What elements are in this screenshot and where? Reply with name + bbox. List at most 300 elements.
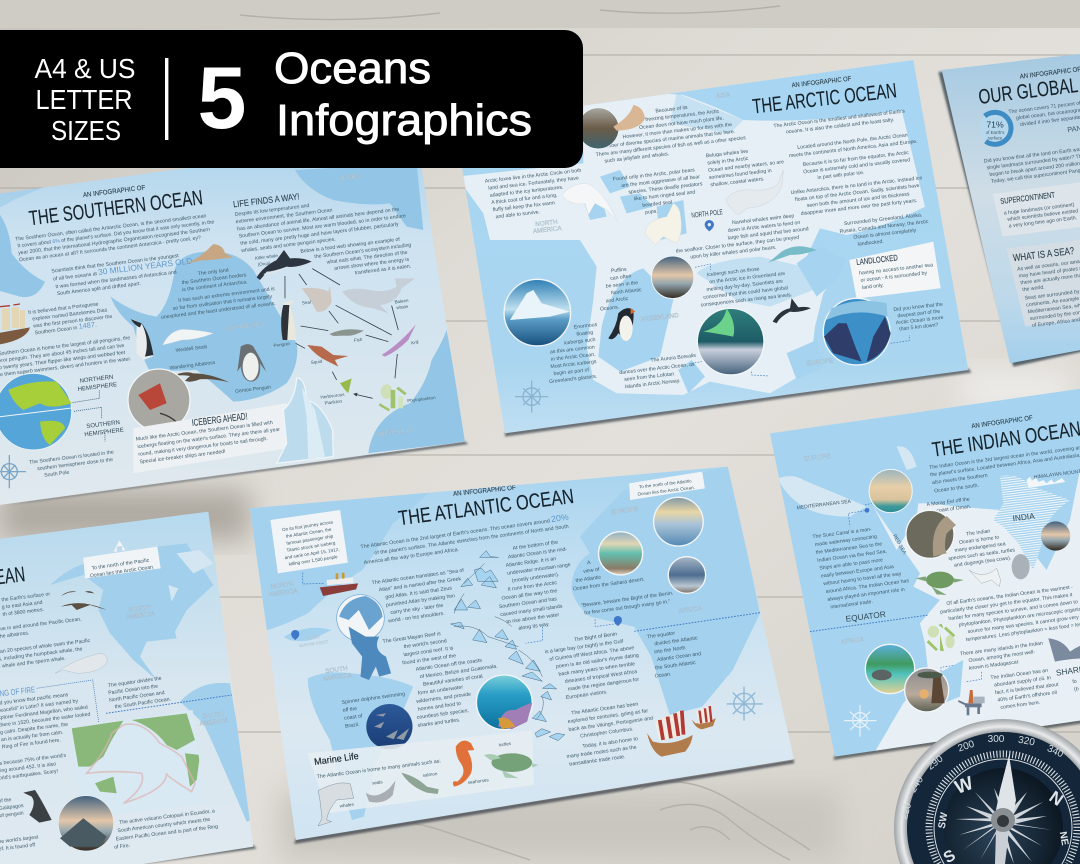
marine life box [307,731,538,826]
text: Mayan reef: Atlantic Ocean off the coasts [415,658,483,673]
text: no land: Unlike Antarctica, there is no land in the Arctic. Instead ice [790,175,923,196]
species labels: Killer whale [255,253,278,261]
text: Bight: is a large bay (or bight) in the Gulf [544,639,624,655]
text: ice: in part with polar ice. [817,170,865,181]
intro text: also meets the Southern [932,473,988,486]
equator text: Pacific Ocean into the [108,683,159,696]
map labels: AFRICA [841,636,865,646]
text: equator: Ocean. [654,671,672,680]
text: mid-Atlantic ridge: Southern Ocean and has [499,596,558,610]
small heading: AN INFOGRAPHIC OF [971,415,1033,430]
text: belugas: solely in the Arctic [707,156,749,167]
what is a sea box [1007,239,1080,330]
equator dashed line [810,615,928,632]
text: landlocked: Russia, Canada and Norway, the Arctic [839,219,929,235]
labels [339,741,512,809]
ring of fire text: Ring of Fire is found here. [2,737,61,751]
landlocked box: having no access to another sea [859,262,933,277]
map: South America [308,672,413,820]
panel: the atlantic ocean [247,463,804,844]
text: foxes: and able to survive. [495,209,540,220]
explorer text: was the first person to discover the [33,314,113,329]
banner: title [274,44,532,145]
map: blue land shapes [583,93,847,393]
map labels: GREENLAND [639,312,680,324]
text: dolphins: coast of [344,713,363,722]
phytoplankton [927,624,955,651]
text: equator: into the North [654,645,686,655]
text: deepest part: Did you know that the [893,302,943,313]
food web arrows [285,269,398,398]
albatross text: live in and around the Pacific Ocean, [0,616,82,633]
map labels: AUSTRALIA [377,427,413,438]
text: Suez: the Mediterranean Sea to the [816,541,883,556]
marine life box: Marine Life [313,750,359,767]
text: location: meets the continents of North America, Asia and Europe. [789,139,918,159]
title: THE ATLANTIC OCEAN [397,485,575,530]
map: Madagascar [938,660,963,703]
text: trade routes: transatlantic trade route. [569,754,626,768]
text: aurora: dances over the Arctic Ocean, as [619,362,695,376]
map labels: AMERICA [199,717,229,728]
explorer text: explorer named Bartolomeu Dias [32,307,108,323]
species labels: Squid [310,359,323,365]
text: Bight: back many years to when terrible [558,661,636,678]
text: polar bears: Found only in the Arctic, polar bears [613,167,695,183]
text: oil: The Indian Ocean has an [990,668,1048,681]
text: Sahara view: the Atlantic [575,575,602,584]
text: icebergs melting: consequences such as rising sea levels. [700,292,793,309]
text: Bight: made the region dangerous for [567,677,640,693]
photo circle: sunrise sea [654,497,703,546]
text: species: Because of its [655,105,688,114]
walrus [185,244,233,264]
text: mid-Atlantic ridge: (mostly underwater). [511,572,560,584]
life text: has an abundance of animal life. Almost all animals here depend on the [237,207,400,232]
text: Bight: of Guinea off West Africa. The above [549,645,635,663]
text: species: freezing temperatures, the Arctic [645,109,720,123]
photo circle: beach [598,532,643,575]
text: endangered species: and dugongs (sea cows). [954,555,1012,569]
north note [629,472,705,500]
photo circle: greenland sea [651,256,694,299]
Atlas statue and globe [337,595,391,680]
map labels: EUROPE [806,357,833,367]
albatross drawing [61,591,107,610]
seal [366,781,396,802]
species labels: Weddell Seals [175,344,208,354]
banner: title: Infographics [276,96,532,145]
map pin: Mayan reef: GREAT [305,634,321,641]
arctic fox [562,183,617,220]
compass degree ring [929,754,1077,864]
text: dolphins: Brazil. [345,722,360,730]
equator text: North Pacific Ocean and [109,690,165,704]
labels: whales [339,802,355,809]
text: enormous icebergs: Most Arctic icebergs [550,359,597,370]
text: puffins: North Atlantic [611,287,642,297]
equator dashed line and bight marker [525,613,760,643]
text: Mayan reef: largest coral reef. It is [403,645,454,658]
banner: sizes text: A4 & US [34,53,136,84]
text: belugas: Ocean and nearby waters, so are [708,159,784,174]
species labels: Wandering Albatross [169,360,216,371]
ring chart 71 percent: of Earth's [986,130,1005,135]
hemisphere labels: HEMISPHERE [78,382,118,393]
map labels: SOUTH [202,711,225,721]
compass letters [937,773,1070,864]
text: landlocked: landlocked. [857,239,884,248]
map pin: Mayan reef [291,630,329,648]
text: polar bears: pups. [645,208,658,216]
text: ice: Because it is so far from the equator, the Arctic [803,150,909,168]
phytoplankton [379,384,407,411]
Titanic note: On its first journey across [282,519,333,532]
text: species: such as jellyfish and whales. [604,151,669,165]
text: endangered species: The Indian [966,528,991,538]
banner: sizes text: SIZES [51,115,121,146]
Antarctica text: the Southern Ocean borders [181,272,247,286]
map: Europe and Africa [571,467,760,715]
text: no land: floats on top of the Arctic Ocean. Sadly, scientists have [795,183,920,203]
text: landlocked: Surrounded by Greenland, Alaska, [844,212,923,227]
compass numerals: 300 [988,734,1005,745]
oil rig [958,690,985,715]
environment text: unexplored and the least understood of all oceans. [161,301,276,321]
narwhal [768,246,817,263]
text: Mayan reef: wilderness, and provide [416,691,472,705]
text: moray: A Moray Eel off the [926,497,970,508]
text: Bight: European visitors. [566,689,608,701]
equator text: The equator divides the [108,676,162,689]
text: aurora: The Aurora Borealis [650,353,696,364]
text: species: Ocean does not have much plant life. [639,115,724,131]
food web text: arrows show where the energy is [334,257,410,272]
text: polar bears: species. These deadly predators [628,181,703,196]
text: Sahara view: A [587,560,591,566]
text: Suez: Ships are able to pass more [819,557,884,572]
north pole marker [691,207,723,231]
text: no land: disappear more and more over the past forty years. [800,198,918,217]
text: belugas: Beluga whales live [706,149,749,159]
map labels: AMERICA [323,672,353,683]
intro text: th of 3800 metres. [2,607,44,618]
map labels: SOUTH [325,665,348,675]
connectors [941,665,982,682]
Titanic note [270,510,348,573]
heading small: AN INFOGRAPHIC OF [791,76,852,89]
herbivorous plankton [340,378,352,393]
text: puffins: be seen in the [606,280,639,290]
text: Mayan reef: Beautiful varieties of coral [423,674,483,688]
supercontinent box: a very long time ago on Earth. [1008,215,1077,229]
location text: southern hemisphere close to the [37,457,113,472]
labels: seahorses [467,777,490,785]
map labels: ASIA [716,91,731,100]
text: Mayan reef: the world's second [403,638,447,650]
species labels: Penguin [273,341,291,348]
text: Mayan reef: homes and food to [417,701,462,713]
photo circle: stormy sea [668,557,706,593]
compass numerals: 340 [1045,743,1065,760]
text: aurora: Islands in Arctic Norway. [625,378,681,390]
north note: To the north of the Atlantic [639,478,692,489]
intro text: divided it into five separate [1020,115,1080,128]
text: enormous icebergs: icebergs such [564,337,596,347]
gentoo penguin [237,344,266,382]
text: foxes: adapted to the icy temperatures. [490,185,564,199]
text: puffins: Puffins [611,267,627,274]
mountains [1027,477,1065,488]
supercontinent box [993,182,1080,237]
food web text: what eats what. The direction of the [326,250,408,266]
map labels: EUROPE [611,506,638,516]
map labels [125,604,229,728]
banner: number 5: 5 [198,48,246,147]
text: Mayan reef: found in the west of the [402,653,457,666]
labels: turtles [498,741,512,747]
north note: Ocean lies the Arctic Ocean. [637,485,695,497]
landlocked box: land only. [862,283,884,291]
food web [169,250,436,411]
map labels: ANTARCTICA [225,321,266,333]
text: landlocked: Ocean is almost completely [853,228,917,241]
polar bear [645,203,681,245]
text: sharks: (b [1074,686,1079,693]
volcano text: of Fire. [114,843,130,851]
icon: compass rose [844,705,877,737]
panel: the pacific ocean [0,510,260,864]
text: rhyme: for few come out though many go in." [584,599,671,617]
text: islands: Ocean, among the most well- [968,649,1036,664]
Titanic note: and sank on April 15, 1912, [284,547,340,560]
ring chart 71 percent [983,110,1014,147]
whale [318,783,354,826]
species labels: Krill [411,340,419,345]
ring of fire text: g calm. Despite the name, the [0,722,69,736]
puffin [608,308,635,341]
life text: Despite its low temperatures and [234,203,310,218]
sperm whale [55,654,107,673]
text: mid-Atlantic ridge: caused many small islands [500,604,563,618]
hemisphere labels: SOUTHERN [86,420,120,430]
map labels [267,506,703,683]
seahorse [453,741,474,787]
Titanic illustration [320,573,358,596]
text: Suez: without having to travel all the way [823,571,902,587]
ring of fire text: xplorer Ferdinand Magellan, who sailed [0,704,88,721]
map: North America [250,480,440,637]
text: mid-Atlantic ridge: underwater mountain range [507,562,571,577]
text: icebergs melting: Icebergs such as those [707,266,760,278]
intro text: Ocean to the south. [934,483,979,495]
map labels: EQUATOR [845,609,886,624]
photo circle: walrus [578,105,645,149]
map labels: NORTH [128,604,151,614]
text: narwhals: upon by killer whales and polar bears. [690,245,777,260]
photo circle: aurora [697,308,764,375]
compass numerals: 220 [899,801,914,821]
text: deepest part: Arctic Ocean is more [896,315,944,326]
banner: title: Oceans [274,44,431,93]
text: Suez: international trade. [830,599,873,611]
hemisphere labels: NORTHERN [79,375,114,385]
age text: South America split and drifted apart. [57,281,141,297]
intro text: It covers about 6% of the planet's surface. Did you know that it was only recently, in the [17,219,215,249]
iceberg ahead box [133,403,297,473]
text: narwhals: the seafloor. Closer to the surface, they can be preyed [676,235,800,255]
explorer text: It is believed that a Portuguese [28,301,99,316]
orca [257,250,312,280]
intro text: America all the way to Europe and Africa. [363,547,459,566]
text: warmest: harder for many species to survive, and it comes down to [948,599,1078,622]
map labels [225,173,413,438]
icon: compass rose [0,455,26,488]
species labels: Plankton [324,399,343,406]
food web text: the Southern Ocean's ecosystem including [314,242,412,260]
Pangaea text: Did you know that all the land on Earth was [984,147,1080,165]
food web text: Below is a food web showing an example of [300,237,400,255]
text: islands: There are many islands in the Indian [960,641,1043,657]
text: Suez: made waterway connecting [815,534,877,548]
map labels: NORTH [270,581,294,591]
text: species: However, it more than makes up for this with the [622,122,732,140]
text: Suez: Indian Ocean via the Red Sea. [817,549,887,564]
species labels: Gentoo Penguin [235,384,272,395]
environment text: It has such an extreme environment and is [178,286,275,304]
compass numerals [899,734,1065,821]
note: north of the Pacific: To the north of the Pacific [91,558,150,572]
volcano text: The active volcano Cotopaxi in Ecuador, a [119,808,215,826]
iceberg ahead box: round, making it very dangerous for boats to sail through. [138,436,268,458]
equator text: the South Pacific Ocean. [114,696,171,710]
photo circle: sunset coast [1041,521,1070,551]
text: narwhals: Narwhal whales swim deep [732,213,795,226]
text: equator: The equator [647,631,675,640]
text: sharks: fo [1072,679,1077,685]
text: belugas: sometimes found feeding in [709,168,772,181]
sailing ship [0,304,30,345]
text: deepest part: deepest part of the [897,309,941,319]
text: puffins: Oceans. [600,304,619,313]
text: foxes: Arctic foxes live in the Arctic Circle on both [485,168,582,185]
note: north of the Pacific [83,540,161,579]
text: rhyme: "Beware, beware the Bight of the Benin, [581,590,674,609]
shark [1048,638,1080,662]
text: Sahara view: Ocean from the Sahara desert. [573,577,645,592]
small heading: AN INFOGRAPHIC OF [453,485,516,498]
text: mid-Atlantic ridge: It runs from the Arctic [507,580,558,593]
photo circle: dolphins [366,704,413,749]
text: Atlas: The Atlantic ocean translates as "Sea of [371,568,464,586]
text: Mayan reef: The Great Mayan Reef is [382,631,441,645]
title: THE SOUTHERN OCEAN [28,186,204,230]
text: dolphins: off the [342,706,358,714]
food web penguin [281,300,296,340]
map labels: AFRICA [678,605,703,615]
Titanic note: killing over 1,500 people [288,554,338,567]
ring of fire text: there in 1520, because the water looked [0,712,91,729]
text: ice: Ocean is extremely cold and is usually covered [803,157,911,175]
emperor penguin text: Southern Ocean is home to the largest of all penguins, the [0,335,131,357]
text: Suez: always played an important role in [827,587,905,603]
map: pale polar sea [457,94,925,395]
text: enormous icebergs: floating [576,330,594,338]
compass numerals: 320 [1017,735,1036,748]
life text: extreme environment, the Southern Ocean [235,207,333,225]
north pole marker: NORTH POLE [691,207,723,220]
photo circle: icebreaker [128,369,190,431]
text: enormous icebergs: begin as part of [553,367,590,377]
title banner [0,30,583,168]
text: Mayan reef: countless fish species, [416,708,469,721]
supercontinent box: SUPERCONTINENT [1000,190,1056,206]
volcano text: Eastern Pacific Ocean and is part of the Ring [115,824,218,842]
compass letters: W [952,773,976,799]
Antarctica text: is the continent of Antarctica. [182,279,248,293]
what is a sea box: Seas are surrounded by [1024,289,1080,302]
seal [969,568,1001,587]
photo circle: coral reef [476,675,532,730]
text: foxes: A thick coat of fur and a long, [491,193,558,206]
supercontinent box: a huge landmass (or continent) [1004,202,1075,217]
iceberg ahead box: Special ice-breaker ships are needed! [139,449,226,465]
seal [302,286,332,312]
photo circle: moray eel [906,510,956,558]
hemisphere labels: HEMISPHERE [84,428,124,438]
viking ships [647,705,716,757]
headings: AN INFOGRAPHIC OF [83,185,146,199]
text: endangered species: many endangered sea [954,541,1006,554]
mid-Atlantic ridge mountains [451,551,565,741]
text: oil: abundant supply of oil. In [994,675,1052,689]
earthquake text: orld's earthquakes. Scary! [0,768,58,782]
map labels: MEDITERRANEAN SEA [796,499,852,511]
compass letters: NE [1057,831,1070,847]
text: polar bears: bearded seal [642,199,672,209]
photo circle: iceberg [504,279,571,346]
ring of fire heading [0,680,99,722]
text: Suez: easily between Europe and Asia [821,564,894,580]
text: islands: known is Madagascar. [969,659,1020,672]
text: warmest: Of all Earth's oceans, the Indian Ocean is the warmest - [946,584,1073,607]
hemisphere labels [73,374,124,442]
intro text: of the planet's surface. The Atlantic stretches from the continents of North and South [374,524,569,556]
text: endangered species: species such as seals, turtles [948,547,1016,562]
text: explored: back as the Vikings, Portuguese and [568,716,654,733]
text: Suez: The Suez Canal is a man- [812,527,872,540]
text: polar bears: like to hunt ringed seal and [634,189,696,202]
compass [894,719,1080,864]
map labels [796,453,1080,678]
galapagos penguin [23,790,52,823]
text: Atlas: Atlas" and is named after the Greek [378,576,462,593]
Titanic note: the Atlantic Ocean, the [286,527,332,539]
text: intro: oceans. It is also the coldest and the least salty. [786,117,894,135]
earthquake text: is because 75% of the world's [0,753,66,767]
life text: Southern Ocean to survive. Most are warm blooded, so in order to endure [238,213,406,240]
text: icebergs melting: melting day-by-day. Scientists are [706,278,784,293]
text: Mayan reef: sharks and turtles. [417,717,461,729]
map labels: INDIA [1012,511,1036,523]
supercontinent box: which scientists believe existed [1007,208,1079,223]
text: trade routes: many trade routes such as the [566,744,637,760]
map pin: Mayan reef: MAYAN REEF [299,639,329,648]
compass dial [943,768,1063,864]
dugong [1012,554,1030,579]
text: Atlas: punished Atlas by making him [386,593,455,609]
map: pale ocean [870,453,1080,760]
